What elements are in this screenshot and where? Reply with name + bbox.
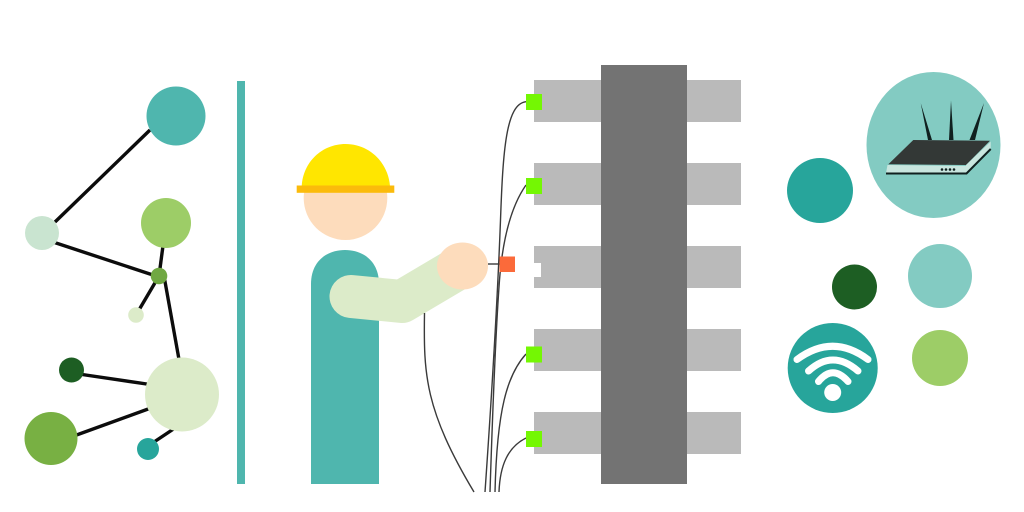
hard hat brim [297,186,394,193]
circle: dark green [832,264,877,310]
router status lights [941,168,955,171]
wifi badge [788,323,878,413]
node: large teal [146,86,206,146]
node: hub green [151,268,167,284]
worker hand [437,242,488,290]
node: mid green [24,412,78,465]
router side face [966,142,991,172]
router badge [866,72,1000,218]
worker torso [311,250,379,484]
network graph: connected nodes [24,86,219,465]
node: tiny pale [128,307,144,323]
router base edge [886,149,991,174]
connector: orange active terminal [500,256,515,272]
worker head [304,156,387,240]
router front face [886,165,966,173]
router antennas [921,100,984,140]
wifi signal arcs [797,346,868,382]
chip pins [534,80,741,454]
router top face [888,140,990,165]
node: pale mint [25,216,59,250]
graph connecting lines [50,130,180,446]
router background circle [866,72,1000,218]
hard hat dome [302,144,390,186]
wifi background circle [788,323,878,413]
circle: teal [787,158,853,223]
circuit board chip [534,65,741,484]
wires [424,102,526,492]
node: small teal [137,438,159,460]
chip body [601,65,687,484]
connectors: green terminals [526,94,542,447]
node: light green [141,198,191,248]
worker arm [351,266,462,302]
circle: light green [912,330,968,386]
vertical divider bar [237,81,245,484]
wifi dot [824,384,841,401]
worker figure [297,144,488,484]
node: dark green [59,358,84,382]
node: large pale green [145,358,219,432]
circle: light teal [908,244,972,308]
